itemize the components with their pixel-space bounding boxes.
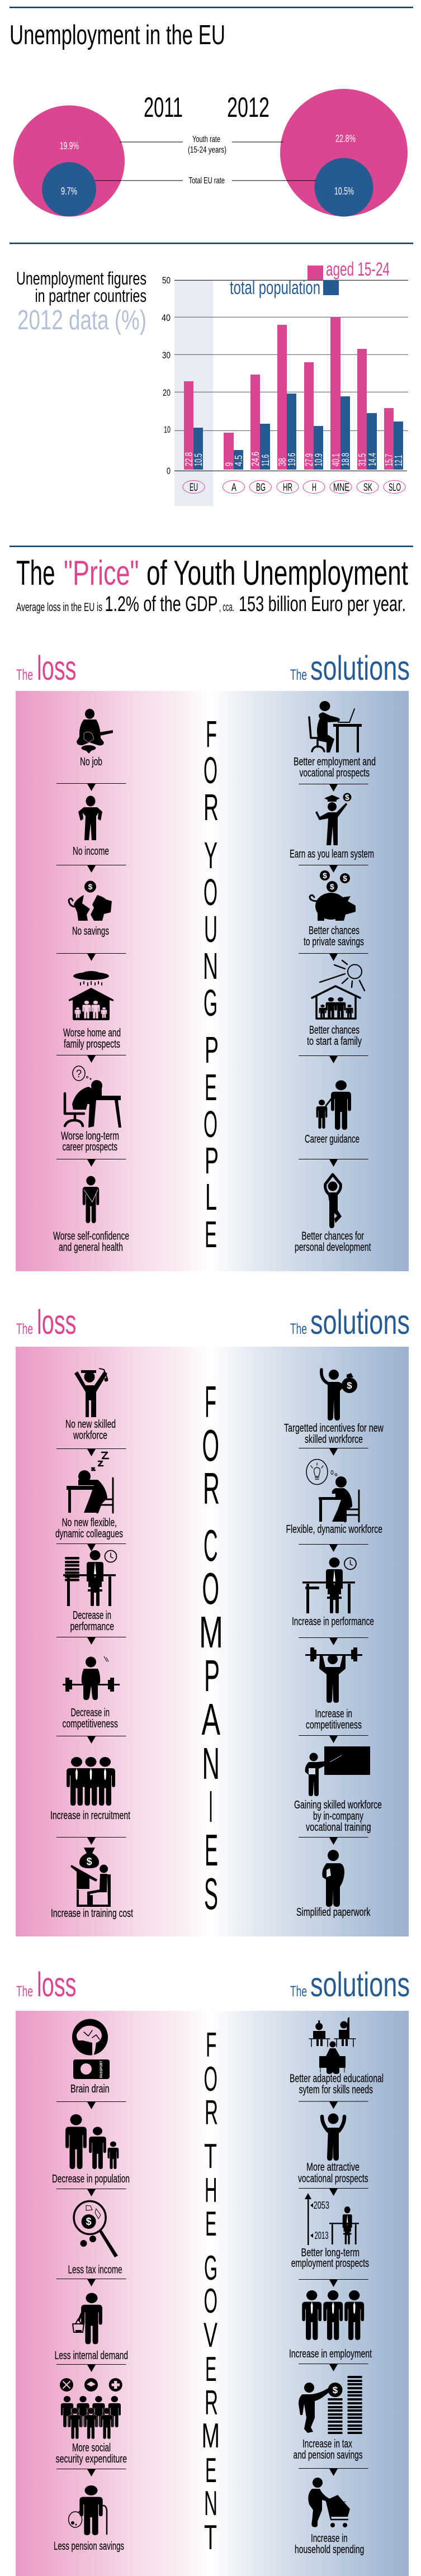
bar values: 15.7: [384, 454, 395, 466]
bar values: 38: [277, 458, 288, 466]
total rate legend: Total EU rate: [189, 176, 225, 186]
label: No new skilled: [65, 1418, 116, 1431]
arrow: [56, 783, 126, 791]
bar values: 27.9: [304, 453, 315, 466]
label: No savings: [72, 925, 109, 937]
label: Increase in recruitment: [50, 1809, 130, 1822]
label: performance: [70, 1620, 114, 1633]
label: Gaining skilled workforce: [294, 1798, 382, 1811]
label: Increase in performance: [292, 1615, 374, 1628]
label: [295, 1230, 371, 1253]
vertical label: for young people: G: [204, 982, 217, 1024]
vertical label: for companies: O: [202, 1420, 219, 1470]
icon: graduate with diploma: [74, 1368, 108, 1417]
label: Better chances: [309, 1024, 359, 1036]
label: No income: [73, 845, 109, 858]
arrow: [299, 865, 368, 873]
label: dynamic colleagues: [55, 1527, 123, 1540]
icon: worker with raised arms: [322, 2113, 344, 2161]
label: Worse home and: [63, 1026, 121, 1039]
vertical label: for young people: E: [205, 1067, 217, 1109]
icon: shopper with cart: [308, 2478, 350, 2527]
vertical label: for the goverment: V: [204, 2316, 217, 2355]
arrow: [299, 1544, 368, 1552]
label: competitiveness: [63, 1717, 118, 1730]
label: Increase in: [311, 2532, 348, 2545]
vertical label: for young people: N: [203, 945, 218, 987]
label: [53, 1230, 129, 1253]
label: Decrease in population: [52, 2172, 130, 2185]
arrow: [56, 1543, 126, 1551]
label: to private savings: [304, 935, 364, 948]
icon: adult with child: [316, 1080, 351, 1130]
bar values: 19.6: [286, 453, 297, 466]
axis labels: 20: [163, 387, 171, 398]
circle 2012: 10.5%: [334, 186, 354, 197]
bar values: 14.4: [367, 453, 378, 466]
icon: brain drain with passport: [72, 2019, 110, 2079]
vertical label: for young people: O: [204, 750, 217, 792]
label: More attractive: [306, 2161, 359, 2174]
heading: the loss: loss: [37, 1966, 76, 2004]
label: Less pension savings: [54, 2540, 124, 2553]
circle 2011: [13, 105, 125, 217]
country labels: MNE: [333, 482, 349, 494]
label: Earn as you learn system: [290, 847, 374, 860]
legend: aged 15-24: [326, 259, 390, 280]
vertical label: for young people: Y: [204, 835, 217, 877]
arrow: [56, 1055, 126, 1063]
icon: man stacking coins: [299, 2376, 362, 2434]
label: [307, 1024, 362, 1048]
arrow: [56, 1637, 126, 1645]
icon: man with empty pockets: [78, 796, 102, 840]
legend: total population: [230, 277, 320, 299]
vertical label: for companies: R: [203, 1464, 220, 1513]
icon: broken piggy bank: [69, 881, 112, 921]
label: More social: [72, 2441, 111, 2454]
country labels: SK: [363, 482, 372, 494]
arrow: [299, 2364, 368, 2371]
label: [294, 755, 376, 779]
vertical label: for the goverment: O: [204, 2060, 217, 2099]
bar values: 11.6: [260, 454, 271, 466]
icon: man unable to lift barbell: [63, 1656, 120, 1700]
icon: magnifier over coins: [74, 2201, 118, 2257]
vertical label: for the goverment: H: [205, 2171, 217, 2210]
circle 2012: 22.8%: [335, 133, 356, 144]
vertical label: for the goverment: R: [205, 2094, 218, 2132]
subheading: average loss: Average loss in the EU is: [16, 601, 102, 614]
vertical label: for young people: R: [204, 787, 219, 828]
arrow: [299, 2101, 368, 2109]
vertical label: for companies: O: [202, 1564, 219, 1613]
heading: the solutions: The: [290, 1320, 307, 1337]
vertical label: for young people: F: [206, 713, 217, 755]
icon: worker with paper pile and clock: [63, 1550, 116, 1606]
icon: classroom: [309, 2017, 356, 2074]
label: [295, 2532, 364, 2556]
arrow: [56, 2469, 126, 2476]
circle 2011: 9.7%: [61, 186, 77, 197]
label: vocational training: [306, 1821, 371, 1834]
label: to start a family: [307, 1035, 362, 1048]
arrow: [299, 2279, 368, 2287]
icon: person at laptop: [309, 701, 362, 752]
heading: the loss: loss: [37, 649, 76, 687]
heading: the loss: The: [16, 1320, 33, 1337]
icon: piggy bank with coins: $: [343, 874, 347, 883]
icon: house with sun: [312, 960, 365, 1019]
heading: the price of youth unemployment: "Price": [64, 554, 139, 593]
arrow: [56, 1159, 126, 1167]
label: [63, 1706, 118, 1730]
label: Worse self-confidence: [53, 1230, 129, 1243]
label: [65, 1418, 116, 1442]
vertical label: for the goverment: O: [204, 2282, 217, 2321]
vertical label: for the goverment: R: [205, 2384, 218, 2422]
country labels: HR: [283, 482, 292, 494]
label: [56, 2441, 127, 2465]
vertical label: for young people: O: [204, 1104, 217, 1145]
vertical label: for the goverment: F: [206, 2026, 217, 2064]
label: [70, 1609, 114, 1633]
axis labels: 0: [167, 466, 171, 476]
heading: the loss: The: [16, 1983, 33, 2000]
label: personal development: [295, 1241, 371, 1253]
label: [61, 1129, 119, 1153]
label: career prospects: [63, 1140, 117, 1153]
icon: broken piggy bank: $: [88, 882, 93, 891]
arrow: [299, 1448, 368, 1456]
icon: man with shopping basket: [73, 2293, 102, 2344]
label: Decrease in: [70, 1706, 110, 1719]
vertical label: for companies: A: [201, 1694, 220, 1744]
vertical label: for young people: E: [205, 1214, 217, 1256]
country labels: A: [231, 482, 236, 494]
subheading: average loss: , cca.: [219, 601, 234, 614]
axis labels: 50: [162, 275, 171, 286]
bar values: 4.5: [233, 455, 244, 466]
youth rate legend: [120, 135, 283, 155]
vertical label: for the goverment: N: [204, 2484, 217, 2523]
vertical label: for the goverment: T: [204, 2137, 217, 2176]
arrow: [299, 1055, 368, 1063]
arrow: [56, 2101, 126, 2109]
label: Increase in tax: [302, 2437, 352, 2450]
label: Better chances for: [301, 1230, 364, 1243]
axis labels: 10: [164, 424, 171, 435]
label: workforce: [73, 1429, 107, 1442]
rule: [10, 546, 413, 547]
chart heading: 2012 data (%): [17, 305, 146, 335]
bar values: 10.5: [193, 453, 204, 466]
label: skilled workforce: [305, 1433, 363, 1446]
label: Simplified paperwork: [296, 1906, 371, 1919]
icon: graduate with coin: [315, 793, 351, 845]
label: [284, 1422, 384, 1446]
icon: man with paper: [322, 1850, 344, 1907]
label: and pension savings: [293, 2449, 362, 2461]
icon: piggy bank with coins: [310, 870, 356, 921]
country labels: [183, 481, 405, 494]
heading: the solutions: The: [290, 1983, 307, 2000]
vertical label: for young people: [203, 713, 219, 1256]
youth rate legend: Youth rate: [192, 135, 220, 144]
icon: money bag over training desk: [70, 1848, 111, 1907]
label: household spending: [295, 2543, 364, 2556]
icon: worker with clock: [302, 1557, 356, 1613]
label: Decrease in: [73, 1609, 111, 1622]
icon: house under rain cloud: [69, 971, 113, 1020]
circle 2012: [280, 89, 408, 217]
panel: for the government: [16, 2011, 409, 2576]
icon: sleeping person at desk: [67, 1452, 113, 1513]
bar values: 24.6: [250, 452, 261, 466]
label: [294, 1798, 382, 1834]
icon: busker with guitar: [77, 709, 113, 754]
panel: for young people: [16, 691, 409, 1271]
panel: for companies: [16, 1347, 409, 1936]
country labels: SLO: [389, 482, 401, 494]
icon: money bag over training desk: $: [87, 1856, 92, 1867]
label: vocational prospects: [298, 2172, 368, 2185]
label: [291, 2246, 369, 2270]
arrow: [299, 784, 368, 792]
vertical label: for companies: I: [209, 1782, 213, 1831]
heading: the loss: [16, 649, 76, 687]
chart: circles youth and total rate: [13, 89, 408, 217]
heading: the loss: [16, 1303, 76, 1341]
icon: man lifting barbell: [305, 1647, 362, 1703]
vertical label: for young people: L: [205, 1176, 217, 1218]
arrow: [56, 2279, 126, 2286]
icon: man stacking coins: $: [333, 2385, 338, 2395]
chart heading: in partner countries: [35, 286, 146, 306]
icon: teacher at blackboard: [305, 1746, 370, 1796]
icon: yoga pose: [325, 1175, 342, 1228]
bar values: [183, 452, 404, 466]
heading: the loss: loss: [37, 1303, 76, 1341]
vertical label: for companies: F: [205, 1377, 216, 1427]
icon: man with money bag: [321, 1370, 357, 1420]
vertical label: for young people: P: [205, 1029, 219, 1071]
label: Less internal demand: [55, 2349, 128, 2362]
icon: long-term timeline: [305, 2193, 359, 2245]
arrow: [56, 2189, 126, 2196]
label: Better employment and: [294, 755, 376, 768]
label: Less tax income: [68, 2264, 122, 2276]
country labels: BG: [256, 482, 266, 494]
bar values: 12.1: [393, 455, 404, 466]
vertical label: for companies: N: [202, 1739, 220, 1788]
country labels: H: [312, 482, 316, 494]
icon: crowd with social security symbols: [60, 2378, 122, 2439]
heading: the price of youth unemployment: [16, 554, 408, 593]
label: competitiveness: [306, 1718, 362, 1731]
chart heading: Unemployment figures: [16, 268, 146, 288]
vertical label: for companies: E: [205, 1825, 218, 1875]
year 2011: 2011: [144, 92, 183, 123]
arrow: [56, 865, 126, 873]
heading: the solutions: The: [290, 666, 307, 683]
arrow: [299, 953, 368, 961]
label: employment prospects: [291, 2257, 369, 2270]
label: Brain drain: [70, 2082, 110, 2095]
label: Increase in: [315, 1707, 352, 1720]
label: [55, 1516, 123, 1540]
icon: magnifier over coins: $: [86, 2216, 92, 2227]
bar values: 31.5: [357, 453, 368, 466]
icon: worried person at desk: ?: [76, 1068, 82, 1080]
bars: [184, 317, 403, 470]
icon: shrinking population: [65, 2114, 119, 2169]
label: and general health: [59, 1241, 123, 1253]
arrow: [56, 953, 126, 961]
youth rate legend: (15-24 years): [188, 145, 226, 155]
label: Increase in training cost: [51, 1907, 133, 1920]
arrow: [56, 1837, 126, 1845]
axis labels: 40: [162, 312, 171, 323]
bar values: 10.9: [313, 453, 324, 466]
icon: long-term timeline: 2053: [314, 2200, 329, 2211]
chart heading: [16, 268, 146, 335]
label: [293, 2437, 362, 2461]
icon: piggy bank with coins: $: [323, 871, 327, 880]
bar values: 18.8: [340, 453, 351, 466]
label: [298, 2161, 368, 2185]
icon: worried person at desk: [65, 1066, 121, 1128]
vertical label: for the goverment: E: [205, 2205, 217, 2243]
label: by in-company: [313, 1810, 364, 1822]
vertical label: for the goverment: M: [201, 2417, 220, 2455]
label: sytem for skills needs: [299, 2083, 373, 2096]
bar values: 9: [224, 462, 235, 466]
label: vocational prospects: [300, 766, 370, 779]
icon: three employees: [67, 1757, 115, 1806]
label: No new flexible,: [62, 1516, 117, 1529]
vertical label: for the goverment: E: [205, 2350, 217, 2389]
label: Increase in employment: [289, 2347, 372, 2360]
arrow: [56, 2364, 126, 2372]
label: [290, 2072, 384, 2096]
vertical label: for young people: U: [204, 908, 217, 950]
arrow: [299, 2188, 368, 2196]
year 2012: 2012: [227, 92, 269, 123]
vertical label: for young people: P: [205, 1140, 219, 1182]
heading: the loss: The: [16, 666, 33, 683]
label: [63, 1026, 121, 1050]
icon: graduate with coin: $: [345, 793, 349, 802]
bar values: 22.8: [183, 452, 195, 466]
axis labels: 30: [162, 350, 171, 361]
rule: [10, 243, 413, 244]
icon: man with money bag: $: [347, 1380, 352, 1391]
icon: head-down person: [83, 1176, 99, 1223]
axis labels: [162, 275, 171, 476]
icon: long-term timeline: 2013: [314, 2230, 329, 2241]
label: Better long-term: [301, 2246, 359, 2259]
subheading: average loss: 1.2% of the GDP: [105, 593, 218, 616]
label: security expenditure: [56, 2452, 127, 2465]
bar values: 40.1: [330, 453, 342, 466]
icon: person with idea bubble: [306, 1459, 359, 1522]
vertical label: for the goverment: T: [204, 2518, 217, 2557]
vertical label: for companies: M: [199, 1607, 223, 1657]
arrow: [299, 1637, 368, 1645]
icon: brain drain with passport: PASSPORT: [100, 2061, 103, 2078]
title: Unemployment in the EU: [10, 20, 225, 50]
vertical label: for the goverment: E: [205, 2451, 217, 2490]
label: Career guidance: [305, 1133, 359, 1145]
heading: the loss: [16, 1966, 76, 2004]
arrow: [299, 1735, 368, 1743]
label: [304, 924, 364, 948]
heading: the price of youth unemployment: The: [16, 554, 55, 593]
vertical label: for the goverment: G: [204, 2249, 217, 2288]
label: Worse long-term: [61, 1129, 119, 1143]
bar chart: [162, 259, 408, 506]
label: [306, 1707, 362, 1731]
arrow: [56, 1448, 126, 1456]
subheading: average loss: [16, 593, 406, 616]
label: Better chances: [309, 924, 359, 937]
vertical label: for companies: P: [204, 1651, 220, 1701]
arrow: [299, 1159, 368, 1167]
vertical label: for companies: [199, 1377, 223, 1919]
legend: [230, 259, 390, 299]
arrow: [56, 1736, 126, 1744]
vertical label: for companies: S: [204, 1869, 218, 1919]
icon: three workers with ties: [302, 2290, 364, 2340]
vertical label: for companies: C: [204, 1521, 218, 1570]
circle 2011: 19.9%: [60, 140, 79, 151]
label: No job: [80, 755, 102, 768]
arrow: [299, 2468, 368, 2476]
label: family prospects: [64, 1038, 120, 1050]
vertical label: for the goverment: [201, 2026, 220, 2557]
top rule: [10, 7, 413, 8]
icon: piggy bank with coins: $: [330, 882, 334, 891]
vertical label: for young people: O: [204, 872, 217, 913]
arrow: [299, 1837, 368, 1845]
icon: pensioner with cane and bag: [69, 2485, 107, 2535]
country labels: EU: [190, 482, 198, 494]
